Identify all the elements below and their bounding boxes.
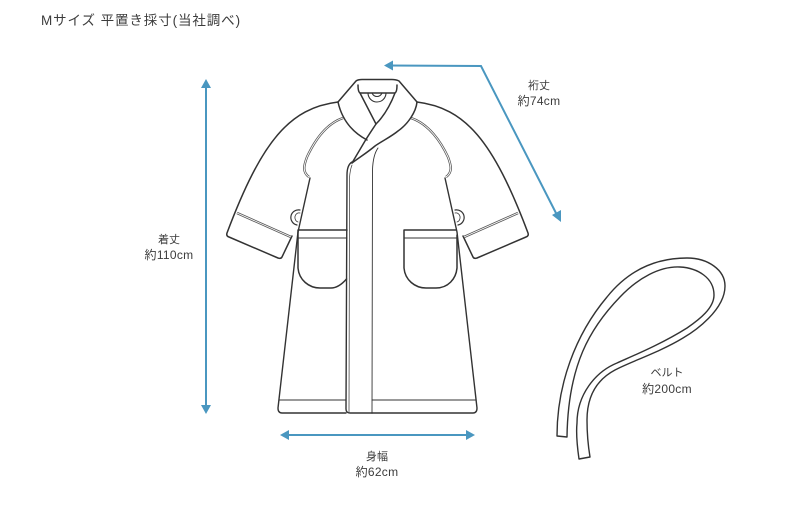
left sleeve (227, 102, 343, 258)
illustration: belt (557, 258, 725, 459)
label: belt (642, 367, 692, 396)
label: belt: 約200cm (642, 381, 692, 396)
arrow: body width (280, 430, 475, 440)
right pocket (404, 230, 457, 288)
label: belt: ベルト (650, 367, 684, 379)
label: body width: 身幅 (366, 449, 388, 463)
label: robe length: 約110cm (145, 247, 193, 262)
label: body width: 約62cm (356, 464, 398, 479)
placket (346, 148, 378, 413)
collar (338, 80, 417, 163)
body sides and hem (278, 178, 477, 413)
label: body width (356, 449, 398, 479)
left pocket (298, 230, 347, 288)
label: sleeve length (518, 79, 560, 108)
label: robe length: 着丈 (158, 232, 180, 246)
arrow: sleeve length (384, 60, 561, 222)
label: sleeve length: 約74cm (518, 93, 560, 108)
title: Mサイズ 平置き採寸(当社調べ) (41, 13, 241, 28)
label: sleeve length: 裄丈 (528, 79, 550, 92)
right sleeve (411, 102, 528, 258)
label: robe length (145, 232, 193, 262)
illustration: robe (227, 80, 528, 413)
arrow: robe length (201, 79, 211, 414)
